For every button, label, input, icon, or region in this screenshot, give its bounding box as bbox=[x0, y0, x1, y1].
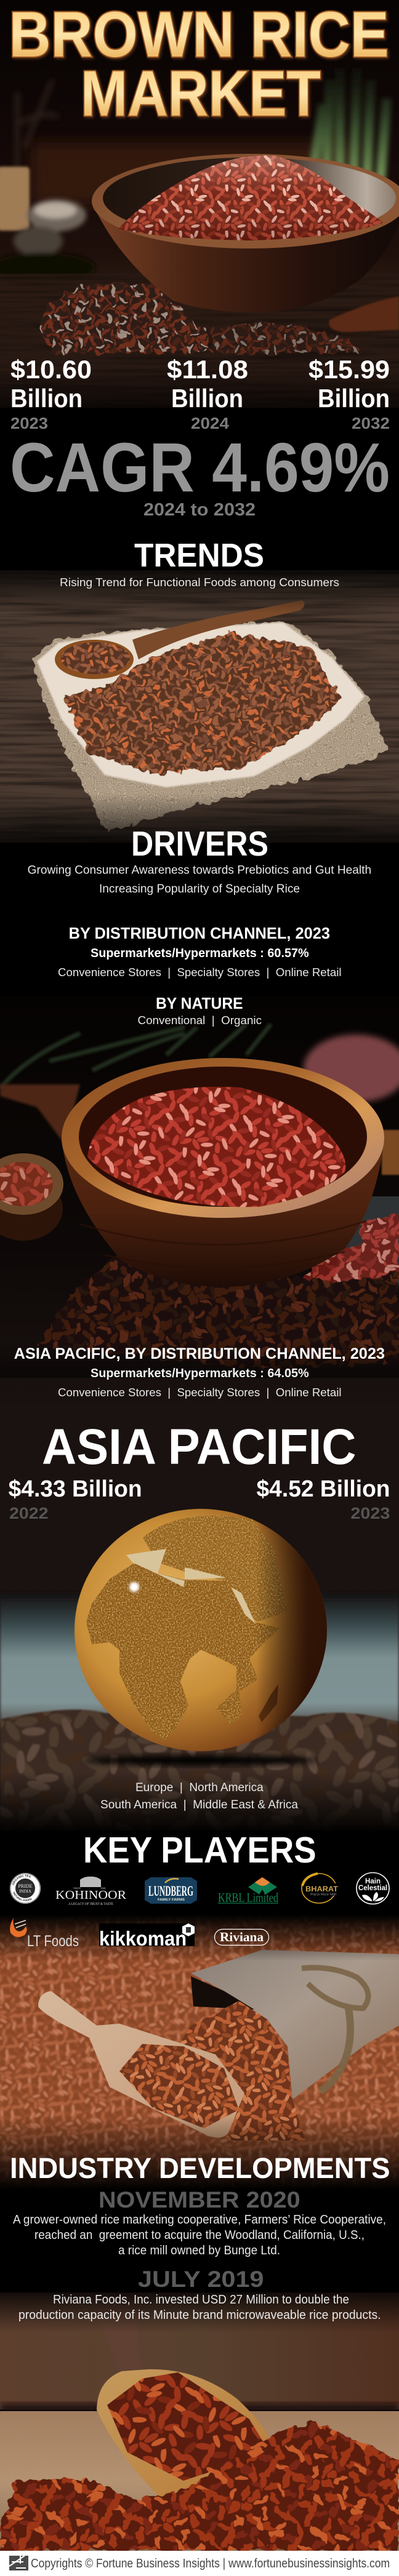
asia pacific 2023 value: $4.52 Billion bbox=[256, 1476, 390, 1502]
stat 2032: $15.99 bbox=[308, 355, 390, 384]
stat 2024 bbox=[167, 355, 248, 432]
asia pacific 2022 value: $4.33 Billion bbox=[9, 1476, 142, 1502]
development: july 2019 text bbox=[18, 2293, 381, 2322]
land masses bbox=[86, 1562, 280, 1739]
right handle bbox=[382, 1130, 399, 1175]
heading: drivers: DRIVERS bbox=[131, 824, 268, 864]
asia pacific by distribution channel: ASIA PACIFIC, BY DISTRIBUTION CHANNEL, 2023 bbox=[14, 1345, 385, 1362]
rope bbox=[302, 1968, 368, 2091]
stat 2023: Billion bbox=[10, 384, 83, 413]
asia pacific 2022 value: 2022 bbox=[9, 1504, 48, 1522]
logo: pride of india: INDIA bbox=[19, 1889, 31, 1894]
closing image: rice with wooden spoon bbox=[0, 2292, 399, 2553]
asia pacific by distribution channel: Supermarkets/Hypermarkets : 64.05% bbox=[91, 1367, 309, 1380]
development: november 2020: NOVEMBER 2020 bbox=[99, 2187, 300, 2212]
asia pacific by distribution channel: Convenience Stores | Specialty Stores | Online Retail bbox=[58, 1386, 341, 1399]
blurred pink rice pile bbox=[304, 1035, 399, 1102]
heading: industry developments: INDUSTRY DEVELOPMENTS bbox=[10, 2152, 390, 2184]
by distribution channel bbox=[58, 924, 341, 979]
left jar bbox=[0, 167, 30, 231]
by nature: Conventional | Organic bbox=[138, 1014, 262, 1027]
logo: kohinoor: SINCE bbox=[73, 1886, 81, 1890]
rice mound bbox=[118, 156, 383, 241]
blurred rice grass bbox=[313, 68, 387, 180]
stat 2023: 2023 bbox=[10, 414, 48, 432]
icon: fortune business insights logo bbox=[9, 2556, 28, 2570]
asia pacific by distribution channel bbox=[14, 1345, 385, 1399]
logo: bharat: Parzi Rice Mill bbox=[310, 1893, 336, 1897]
logo: kohinoor bbox=[55, 1877, 127, 1906]
asia pacific 2023 value: 2023 bbox=[350, 1504, 390, 1522]
logo: lundberg: LUNDBERG bbox=[148, 1883, 193, 1899]
burlap cloth bbox=[32, 621, 389, 833]
by distribution channel: Convenience Stores | Specialty Stores | Online Retail bbox=[58, 966, 341, 979]
footer bar bbox=[0, 2551, 399, 2576]
grey table bbox=[332, 1196, 399, 1286]
logo: krbl limited bbox=[218, 1877, 278, 1905]
by nature bbox=[138, 994, 262, 1027]
logo: krbl limited: KRBL Limited bbox=[218, 1890, 278, 1905]
logo: bharat bbox=[302, 1874, 339, 1903]
logo: lt foods: LT Foods bbox=[27, 1933, 79, 1950]
small bowl left bbox=[0, 1153, 63, 1241]
wooden scoop bbox=[38, 1991, 244, 2137]
logo: pride of india: PRIDE bbox=[18, 1883, 33, 1889]
blurred white bowl and sack bbox=[0, 199, 95, 282]
development: july 2019 text: Riviana Foods, Inc. invested USD 27 Million to double the bbox=[53, 2293, 349, 2307]
stat 2032 bbox=[308, 355, 390, 432]
date: july 2019: JULY 2019 bbox=[138, 2267, 264, 2292]
logo: kohinoor: 1981 bbox=[100, 1886, 107, 1890]
development: november 2020 bbox=[13, 2187, 386, 2257]
spoon bbox=[86, 2292, 273, 2497]
ground of rice bbox=[0, 1709, 399, 1831]
logo: lundberg: FAMILY FARMS bbox=[158, 1898, 185, 1902]
logo: hain celestial bbox=[357, 1872, 389, 1904]
rice pile bbox=[63, 632, 341, 774]
globe image bbox=[0, 1509, 399, 1831]
logo: pride of india bbox=[10, 1873, 41, 1904]
asia pacific 2022 value bbox=[9, 1476, 142, 1522]
sack opening bbox=[191, 1976, 254, 2010]
drivers list: Increasing Popularity of Specialty Rice bbox=[99, 883, 300, 896]
logo: kohinoor: A LEGACY OF TRUST & TASTE bbox=[68, 1902, 113, 1906]
by distribution channel: Supermarkets/Hypermarkets : 60.57% bbox=[91, 947, 309, 960]
dark scattered rice bbox=[37, 1255, 399, 1369]
logo: lt foods bbox=[10, 1918, 79, 1950]
stat 2024: Billion bbox=[171, 384, 243, 413]
wooden spoon bottom right bbox=[329, 296, 399, 332]
bowl section background bbox=[0, 996, 399, 1831]
title: MARKET bbox=[81, 58, 321, 130]
table floor bbox=[0, 274, 399, 408]
logo: kikkoman: kikkoman bbox=[99, 1927, 187, 1950]
linen sheet bbox=[37, 622, 365, 787]
wooden spoon bbox=[55, 600, 305, 679]
heading: trends: TRENDS bbox=[134, 537, 264, 574]
title bbox=[9, 0, 389, 130]
trend text: Rising Trend for Functional Foods among Consumers bbox=[60, 576, 339, 589]
sack bbox=[191, 1950, 399, 2099]
bottom fade bbox=[0, 384, 399, 408]
asia pacific heading: ASIA PACIFIC bbox=[42, 1419, 356, 1475]
heading: key players background bbox=[0, 1831, 399, 1915]
hero image: bowl of brown rice bbox=[0, 0, 399, 408]
stat 2032: 2032 bbox=[352, 414, 390, 432]
logo: pride of india: NATURAL FOODS bbox=[13, 1892, 32, 1901]
logo: bharat: BHARAT bbox=[305, 1885, 339, 1893]
globe bbox=[75, 1509, 327, 1765]
scattered rice bbox=[37, 283, 212, 354]
large wooden bowl bbox=[62, 1058, 384, 1287]
blurred leaves bbox=[0, 1024, 271, 1089]
trends image: rice on burlap bbox=[0, 570, 399, 843]
madagascar bbox=[259, 1684, 278, 1722]
scoop and sack image bbox=[0, 1915, 399, 2190]
logo: riviana: Riviana bbox=[220, 1930, 264, 1944]
by distribution channel: BY DISTRIBUTION CHANNEL, 2023 bbox=[69, 924, 330, 942]
eurasia bbox=[143, 1516, 288, 1622]
stat 2024: 2024 bbox=[191, 414, 230, 432]
pale seas bbox=[126, 1549, 256, 1624]
red rice bowl image bbox=[0, 1024, 399, 1378]
drivers list bbox=[28, 864, 371, 896]
other regions: Europe | North America bbox=[135, 1781, 264, 1794]
red rice mound bbox=[87, 1087, 345, 1207]
by nature: BY NATURE bbox=[156, 994, 243, 1012]
stat 2032: Billion bbox=[318, 384, 390, 413]
drivers list: Growing Consumer Awareness towards Prebiotics and Gut Health bbox=[28, 864, 371, 877]
development: november 2020: A grower-owned rice marketing cooperative, Farmers’ Rice Cooperative, bbox=[13, 2213, 386, 2227]
stat 2023 bbox=[10, 355, 92, 432]
development: november 2020: reached an greement to acquire the Woodland, California, U.S., bbox=[34, 2228, 365, 2242]
blurred dried branches bbox=[17, 80, 58, 169]
scattered rice right bbox=[209, 321, 363, 354]
bowl handle left bbox=[0, 1084, 80, 1144]
development: november 2020: a rice mill owned by Bunge Ltd. bbox=[118, 2244, 280, 2257]
asia pacific 2023 value bbox=[256, 1476, 390, 1522]
bowl bbox=[92, 154, 399, 312]
logo: pride of india: ORGANIC TEA bbox=[12, 1875, 31, 1885]
heading: key players: KEY PLAYERS bbox=[83, 1830, 316, 1870]
teal horizon band bbox=[0, 1593, 399, 1722]
rice pile bbox=[0, 2422, 399, 2551]
stat 2023: $10.60 bbox=[10, 355, 92, 384]
CAGR period: 2024 to 2032 bbox=[143, 500, 256, 520]
development: july 2019 text: production capacity of its Minute brand microwaveable rice products. bbox=[18, 2308, 381, 2322]
logo: hain celestial: Celestial bbox=[358, 1883, 387, 1892]
spilled rice bbox=[178, 2001, 305, 2141]
logo: kohinoor: KOHINOOR bbox=[55, 1888, 127, 1902]
logo: hain celestial: Hain bbox=[365, 1877, 381, 1885]
stat 2024: $11.08 bbox=[167, 355, 248, 384]
right rice cluster bbox=[296, 1215, 399, 1286]
other regions bbox=[100, 1781, 298, 1811]
logo: lundberg bbox=[145, 1877, 197, 1904]
other regions: South America | Middle East & Africa bbox=[100, 1798, 298, 1811]
